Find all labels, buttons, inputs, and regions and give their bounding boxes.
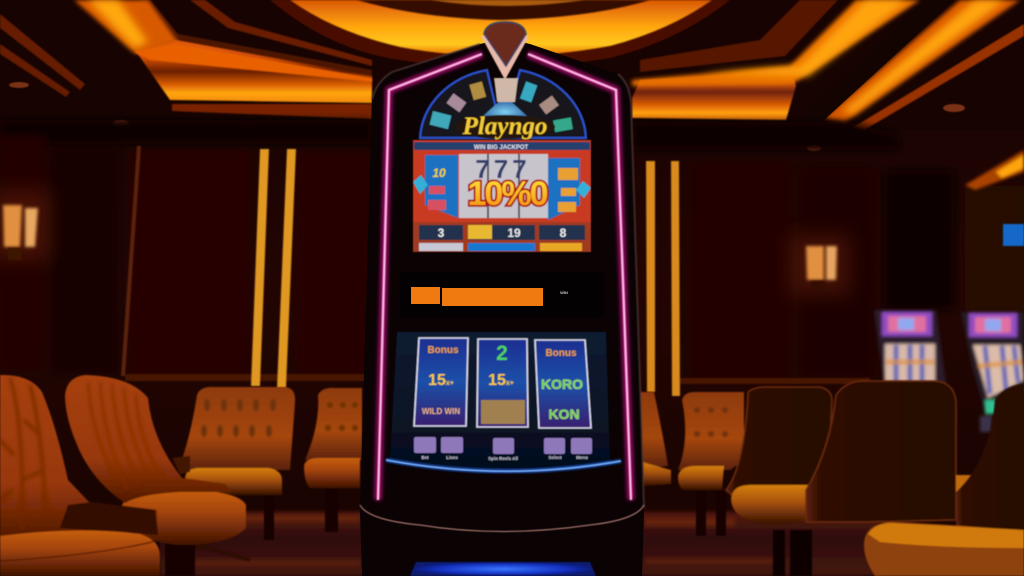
ceiling right light cove: [632, 0, 920, 120]
screen top bar: [414, 142, 590, 150]
reel panel 3: KORO: [541, 376, 583, 392]
chair 1: [0, 375, 160, 576]
large foreground seat top: [868, 523, 1024, 548]
chair 7 legs: [773, 530, 812, 576]
machine cabinet: [360, 38, 644, 576]
chair 1 back: [0, 375, 157, 540]
chair 9 back: [956, 384, 1024, 530]
chair 1 arm: [60, 502, 158, 535]
chair 7 back: [726, 387, 832, 520]
left wall sconce: [0, 190, 50, 260]
reel panel 1: Bonus: [427, 345, 459, 356]
machine side sheen: [372, 44, 644, 508]
medallion shield: [484, 22, 526, 66]
main slot machine: [360, 22, 644, 576]
reel panel 3: [535, 340, 591, 428]
chair 6 tufting: [694, 407, 728, 437]
chair 5 back: [638, 392, 668, 468]
left bonus panel: [425, 155, 458, 218]
touch button labels: [421, 455, 588, 461]
chair 2 tufting lines: [88, 382, 162, 490]
chair 7 seat: [731, 485, 808, 524]
machine bottom trim: [360, 505, 644, 532]
reel panel 1: [414, 338, 468, 426]
touch buttons: [414, 437, 592, 454]
chair 6 back: [678, 392, 744, 470]
large foreground seat: [864, 522, 1024, 576]
fan wheel with symbols: [420, 70, 586, 140]
wall panels: [0, 135, 1024, 384]
right wall light columns: [646, 161, 680, 396]
chair 3: [172, 387, 295, 540]
panel small text: WIN: [560, 290, 568, 295]
reels background: [459, 154, 548, 218]
panel background: [400, 272, 604, 318]
diamond right: [576, 181, 591, 198]
upper game screen: [413, 140, 591, 252]
ceiling right diagonal strip light: [800, 0, 1024, 130]
diamond left: [413, 175, 428, 194]
chair 3 leg: [264, 495, 274, 540]
touch button labels: Spin Reels All: [488, 456, 518, 461]
touch button labels: Bet: [421, 455, 429, 460]
reel sevens: 777: [475, 154, 531, 184]
left panel tiles: [428, 186, 446, 210]
reel panel 3: KON: [548, 406, 580, 422]
readout left: 3: [438, 226, 445, 240]
chair 1 seat: [0, 530, 160, 576]
ceiling left light cove: [74, 0, 372, 103]
background slot machine 1: [874, 310, 946, 384]
chair 8 back: [806, 381, 956, 522]
medallion ribbon: [481, 36, 529, 80]
chair 3 seat: [185, 468, 282, 495]
chair 4 seat: [304, 458, 360, 488]
recessed ceiling lights: [9, 82, 965, 151]
reel panel 1: WILD WIN: [422, 407, 460, 416]
chair 2: [65, 375, 246, 576]
right panel tiles: [558, 168, 578, 212]
readout centre: [468, 225, 535, 240]
chair 2 base: [165, 525, 195, 576]
ceiling left trim beams: [0, 0, 372, 119]
ceiling oval light: [270, 0, 730, 68]
chair 1 seat piping: [0, 541, 156, 561]
chair 6 legs: [696, 490, 726, 536]
readout right: [539, 225, 585, 240]
floor: [160, 512, 880, 576]
logo text plate: [455, 115, 555, 139]
wheel symbol tiles: [430, 81, 573, 132]
far right alcove light: [965, 150, 1024, 190]
touch button labels: Select: [548, 455, 562, 460]
chair 1 tufting lines: [0, 378, 46, 530]
chair 4 behind machine: [168, 388, 362, 560]
far right blue wall screen: [1003, 224, 1024, 246]
blue light arc: [386, 460, 621, 471]
orange bar large: [442, 288, 543, 306]
orange bar small: [411, 287, 440, 304]
reel panel 2: 2: [496, 342, 508, 365]
chair 4 tufting: [325, 402, 358, 431]
readout right: 8: [560, 226, 567, 240]
chair 5 seat: [642, 462, 671, 486]
middle display panel: [400, 272, 604, 318]
chair 6 seat: [678, 466, 724, 490]
readout centre: 19: [507, 226, 521, 240]
chair 3 back: [178, 387, 295, 470]
ceiling: [0, 0, 1024, 151]
chair 4 leg: [325, 488, 338, 532]
medallion emblem: [481, 22, 529, 80]
bottom readouts bar: [413, 222, 591, 252]
reel panel 2: 15x+: [488, 372, 514, 389]
button strip: [419, 243, 582, 251]
chair 4 back: [305, 388, 362, 460]
chair 2 seat: [122, 490, 246, 545]
readout left: [419, 225, 463, 240]
top bar text: WIN BIG JACKPOT: [474, 145, 528, 151]
reel panel 1: 15x+: [428, 372, 454, 389]
touch screen background: [390, 332, 610, 469]
logo text: Playngo: [462, 113, 547, 140]
left panel number: 10: [432, 166, 446, 180]
big number: 10%0: [468, 175, 548, 213]
chair 9 seat sliver: [956, 475, 972, 492]
ceiling dark base: [0, 0, 1024, 130]
right bonus panel: [548, 158, 580, 220]
left wall light columns: [121, 146, 296, 388]
background slot machine 2: [961, 312, 1024, 432]
machine pink neon glow: [378, 54, 631, 500]
wall trim rail: [125, 374, 870, 384]
machine pink neon line: [378, 54, 631, 500]
reel panel 2: [477, 339, 528, 427]
right foreground chairs: [638, 381, 1024, 576]
wheel outer ring: [420, 70, 586, 138]
lower touch screen: [386, 332, 621, 471]
beam under ceiling: [0, 120, 900, 150]
wheel centre portrait: [494, 78, 518, 102]
right wall sconce: [790, 235, 850, 295]
chair 3 arm: [172, 456, 190, 474]
touch button labels: Menu: [576, 455, 588, 460]
chair 2 back: [65, 375, 232, 503]
chair 3 tufting: [201, 399, 276, 437]
touch button labels: Lines: [446, 455, 458, 460]
reel dividers: [488, 154, 519, 218]
blue light arc glow: [386, 460, 621, 471]
screen frame: [413, 140, 591, 252]
machine lower blue glow: [410, 562, 596, 576]
reel panel 3: Bonus: [545, 348, 577, 359]
wheel ray burst: [470, 96, 540, 128]
